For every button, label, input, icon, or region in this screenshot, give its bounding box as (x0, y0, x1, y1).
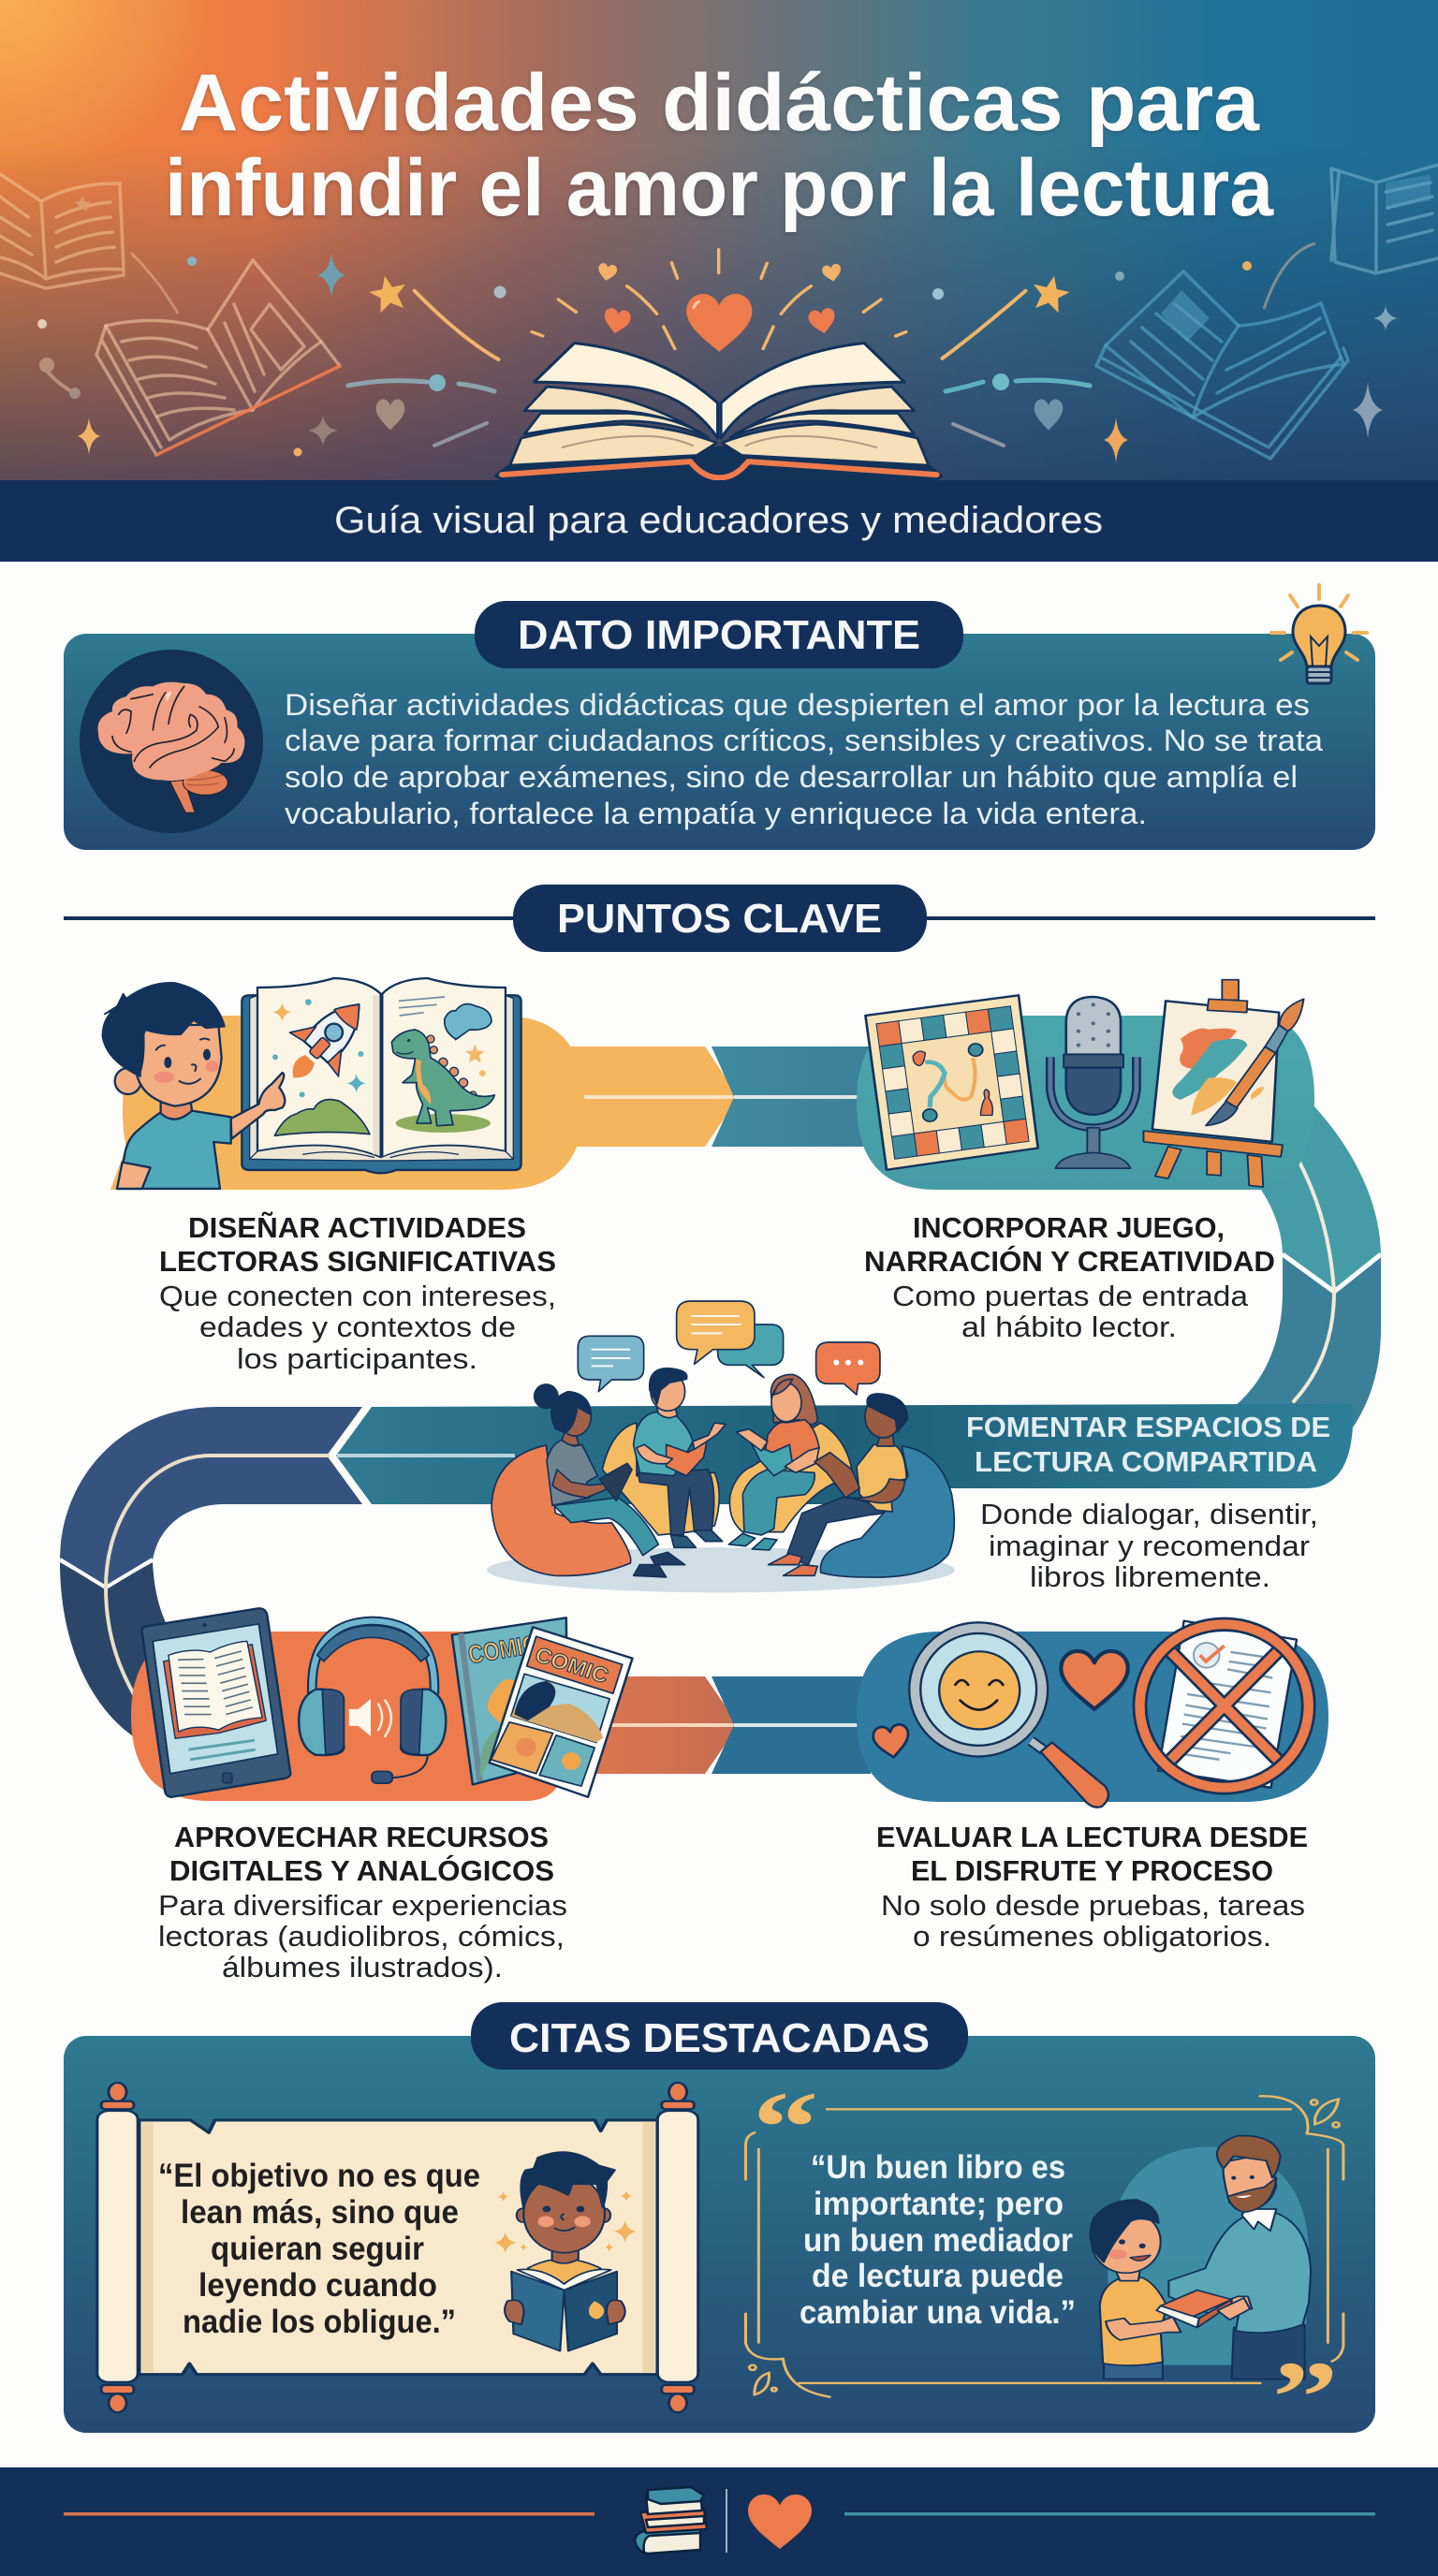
text block: point 2: INCORPORAR JUEGO, (913, 1211, 1225, 1244)
text block: point 5: EL DISFRUTE Y PROCESO (911, 1854, 1273, 1887)
subtitle bar: Guía visual para educadores y mediadores (334, 500, 1103, 541)
ribbon: row 3 connector (562, 1676, 871, 1774)
blob: yellow (110, 1016, 584, 1190)
text block: quote left: lean más, sino que (181, 2194, 459, 2231)
speech bubbles (578, 1301, 880, 1395)
subtitle bar (0, 480, 1438, 562)
icon: tablet, headphones, comics (141, 1608, 632, 1797)
panel: dato importante (64, 585, 1375, 850)
ribbon: left curve (60, 1407, 362, 1741)
heading: puntos clave: PUNTOS CLAVE (557, 896, 882, 942)
point 4: recursos digitales (131, 1608, 632, 1983)
point 3: espacios de lectura compartida (487, 1301, 1330, 1593)
blob: blue (857, 1632, 1328, 1802)
ribbon: row 2 connector (336, 1404, 1353, 1504)
text block: quote left: quieran seguir (211, 2231, 424, 2267)
dinosaur (396, 1114, 491, 1133)
text block: point 3 heading: FOMENTAR ESPACIOS DE (966, 1411, 1330, 1443)
hill (274, 1100, 370, 1135)
heading: puntos clave (64, 885, 1375, 952)
text block: point 1: DISEÑAR ACTIVIDADES (188, 1211, 526, 1244)
icon: boy pointing at picture book (102, 978, 521, 1189)
scroll shape (97, 2083, 698, 2412)
title (165, 58, 1274, 233)
headphones (299, 1621, 446, 1783)
serpentine path ribbon (60, 1046, 1381, 1774)
icon: group reading on beanbags (487, 1301, 955, 1592)
ornate frame and figures (745, 2071, 1343, 2453)
person 4 (769, 1394, 907, 1575)
text block: quote right: importante; pero (814, 2186, 1064, 2222)
icon: light bulb (1271, 585, 1367, 683)
text block: point 3 body: libros libremente. (1030, 1560, 1270, 1593)
text block: point 1: los participantes. (237, 1342, 477, 1375)
text block: point 3 heading (966, 1411, 1330, 1478)
text block: dato (285, 688, 1323, 830)
title: infundir el amor por la lectura (165, 143, 1274, 233)
text block: point 4: APROVECHAR RECURSOS (174, 1821, 549, 1853)
text block: point 5: No solo desde pruebas, tareas (881, 1889, 1305, 1922)
decorative outline book: top right (1331, 165, 1438, 273)
text block: dato: vocabulario, fortalece la empatía y enriquece la vida entera. (285, 797, 1147, 830)
comics: COMIC (532, 1643, 611, 1688)
title: Actividades didácticas para (179, 58, 1260, 148)
text block: dato: Diseñar actividades didácticas que despierten el amor por la lectura es (285, 688, 1310, 722)
man and child sharing a book (1091, 2136, 1311, 2379)
heading: citas destacadas: CITAS DESTACADAS (509, 2015, 930, 2061)
header banner (0, 0, 1438, 481)
text block: point 3 body: Donde dialogar, disentir, (980, 1498, 1318, 1530)
text block: point 2: Como puertas de entrada (892, 1280, 1249, 1312)
text block: quote right: “Un buen libro es (811, 2149, 1065, 2186)
point 1: diseñar actividades (102, 978, 584, 1375)
icon: stack of books (635, 2487, 707, 2554)
text block: quote right: cambiar una vida.” (800, 2294, 1076, 2331)
text block: point 1 (159, 1211, 556, 1375)
blob: orange (131, 1632, 562, 1801)
icon: brain (80, 650, 263, 833)
text block: point 5: o resúmenes obligatorios. (913, 1920, 1271, 1953)
text block: point 4: DIGITALES Y ANALÓGICOS (169, 1853, 554, 1887)
comics: COMIC (466, 1631, 540, 1670)
text block: point 1: LECTORAS SIGNIFICATIVAS (159, 1245, 556, 1278)
text block: point 1: Que conecten con intereses, (159, 1280, 556, 1312)
quote frame (745, 2071, 1343, 2453)
text block: quote right (800, 2149, 1076, 2331)
text block: point 2: NARRACIÓN Y CREATIVIDAD (864, 1244, 1275, 1278)
beanbags (492, 1423, 954, 1577)
text block: point 5 (876, 1821, 1308, 1953)
text block: quote left: leyendo cuando (198, 2267, 437, 2304)
footer (0, 2467, 1438, 2576)
text block: point 3 heading: LECTURA COMPARTIDA (975, 1445, 1317, 1478)
boy (102, 983, 285, 1189)
icon: heart (748, 2495, 812, 2549)
person 2 (634, 1368, 726, 1547)
point 5: evaluar la lectura (857, 1621, 1328, 1953)
decorative outline book: top left (0, 174, 124, 288)
person 1 (535, 1384, 685, 1577)
text block: quote left (158, 2158, 480, 2340)
rocket (269, 983, 383, 1100)
text block: dato: solo de aprobar exámenes, sino de desarrollar un hábito que amplía el (285, 760, 1298, 794)
ribbon: row 1 connector (571, 1046, 880, 1147)
magnifying glass (909, 1622, 1108, 1808)
text block: point 1: edades y contextos de (199, 1310, 516, 1343)
text block: point 4 (158, 1821, 567, 1983)
text block: point 3 body (980, 1498, 1318, 1593)
tablet (141, 1608, 290, 1797)
text block: quote right: de lectura puede (812, 2258, 1064, 2294)
quote scroll (97, 2083, 698, 2412)
heading: citas destacadas (471, 2002, 968, 2070)
test paper crossed out (1140, 1621, 1309, 1788)
heart large (1061, 1651, 1128, 1709)
open picture book (242, 978, 521, 1173)
text block: point 2: al hábito lector. (961, 1310, 1177, 1343)
microphone (1050, 997, 1137, 1168)
decorative outline book: left tilted (96, 260, 340, 455)
text block: dato: clave para formar ciudadanos críticos, sensibles y creativos. No se trata (285, 724, 1323, 757)
ribbon: right curve (1217, 1103, 1381, 1427)
text block: quote left: “El objetivo no es que (158, 2158, 480, 2194)
text block: quote right: un buen mediador (803, 2222, 1073, 2259)
text block: point 3 body: imaginar y recomendar (989, 1530, 1310, 1562)
boy reading (505, 2152, 625, 2351)
board game (865, 995, 1038, 1170)
text block: point 2 (864, 1211, 1275, 1343)
panel: citas destacadas (64, 2002, 1375, 2453)
text block: point 5: EVALUAR LA LECTURA DESDE (876, 1821, 1308, 1853)
icon: board game, microphone, easel (865, 980, 1304, 1187)
blob: teal (857, 1016, 1314, 1190)
text block: point 4: lectoras (audiolibros, cómics, (158, 1920, 565, 1953)
heading: dato importante (475, 601, 963, 668)
text block: point 4: Para diversificar experiencias (158, 1889, 567, 1922)
decorative outline book: right tilted (1096, 271, 1348, 459)
rays and hearts above the book (532, 250, 906, 352)
cloud and marks (445, 1004, 492, 1040)
text block: quote left: nadie los obligue.” (183, 2304, 456, 2340)
icon: open book with hearts (495, 250, 942, 480)
point 2: incorporar juego (857, 980, 1314, 1343)
person 3 (728, 1374, 819, 1550)
decorative sparkles, dots and trails (37, 243, 1398, 462)
icon: magnifier, hearts, crossed-out test (872, 1621, 1309, 1808)
text block: point 4: álbumes ilustrados). (222, 1951, 503, 1983)
easel (1143, 980, 1304, 1187)
closing quote mark: ” (1272, 2341, 1338, 2453)
comics (452, 1617, 632, 1797)
heading: dato importante: DATO IMPORTANTE (518, 612, 920, 658)
heart small (872, 1723, 911, 1760)
opening quote mark: “ (753, 2071, 818, 2184)
